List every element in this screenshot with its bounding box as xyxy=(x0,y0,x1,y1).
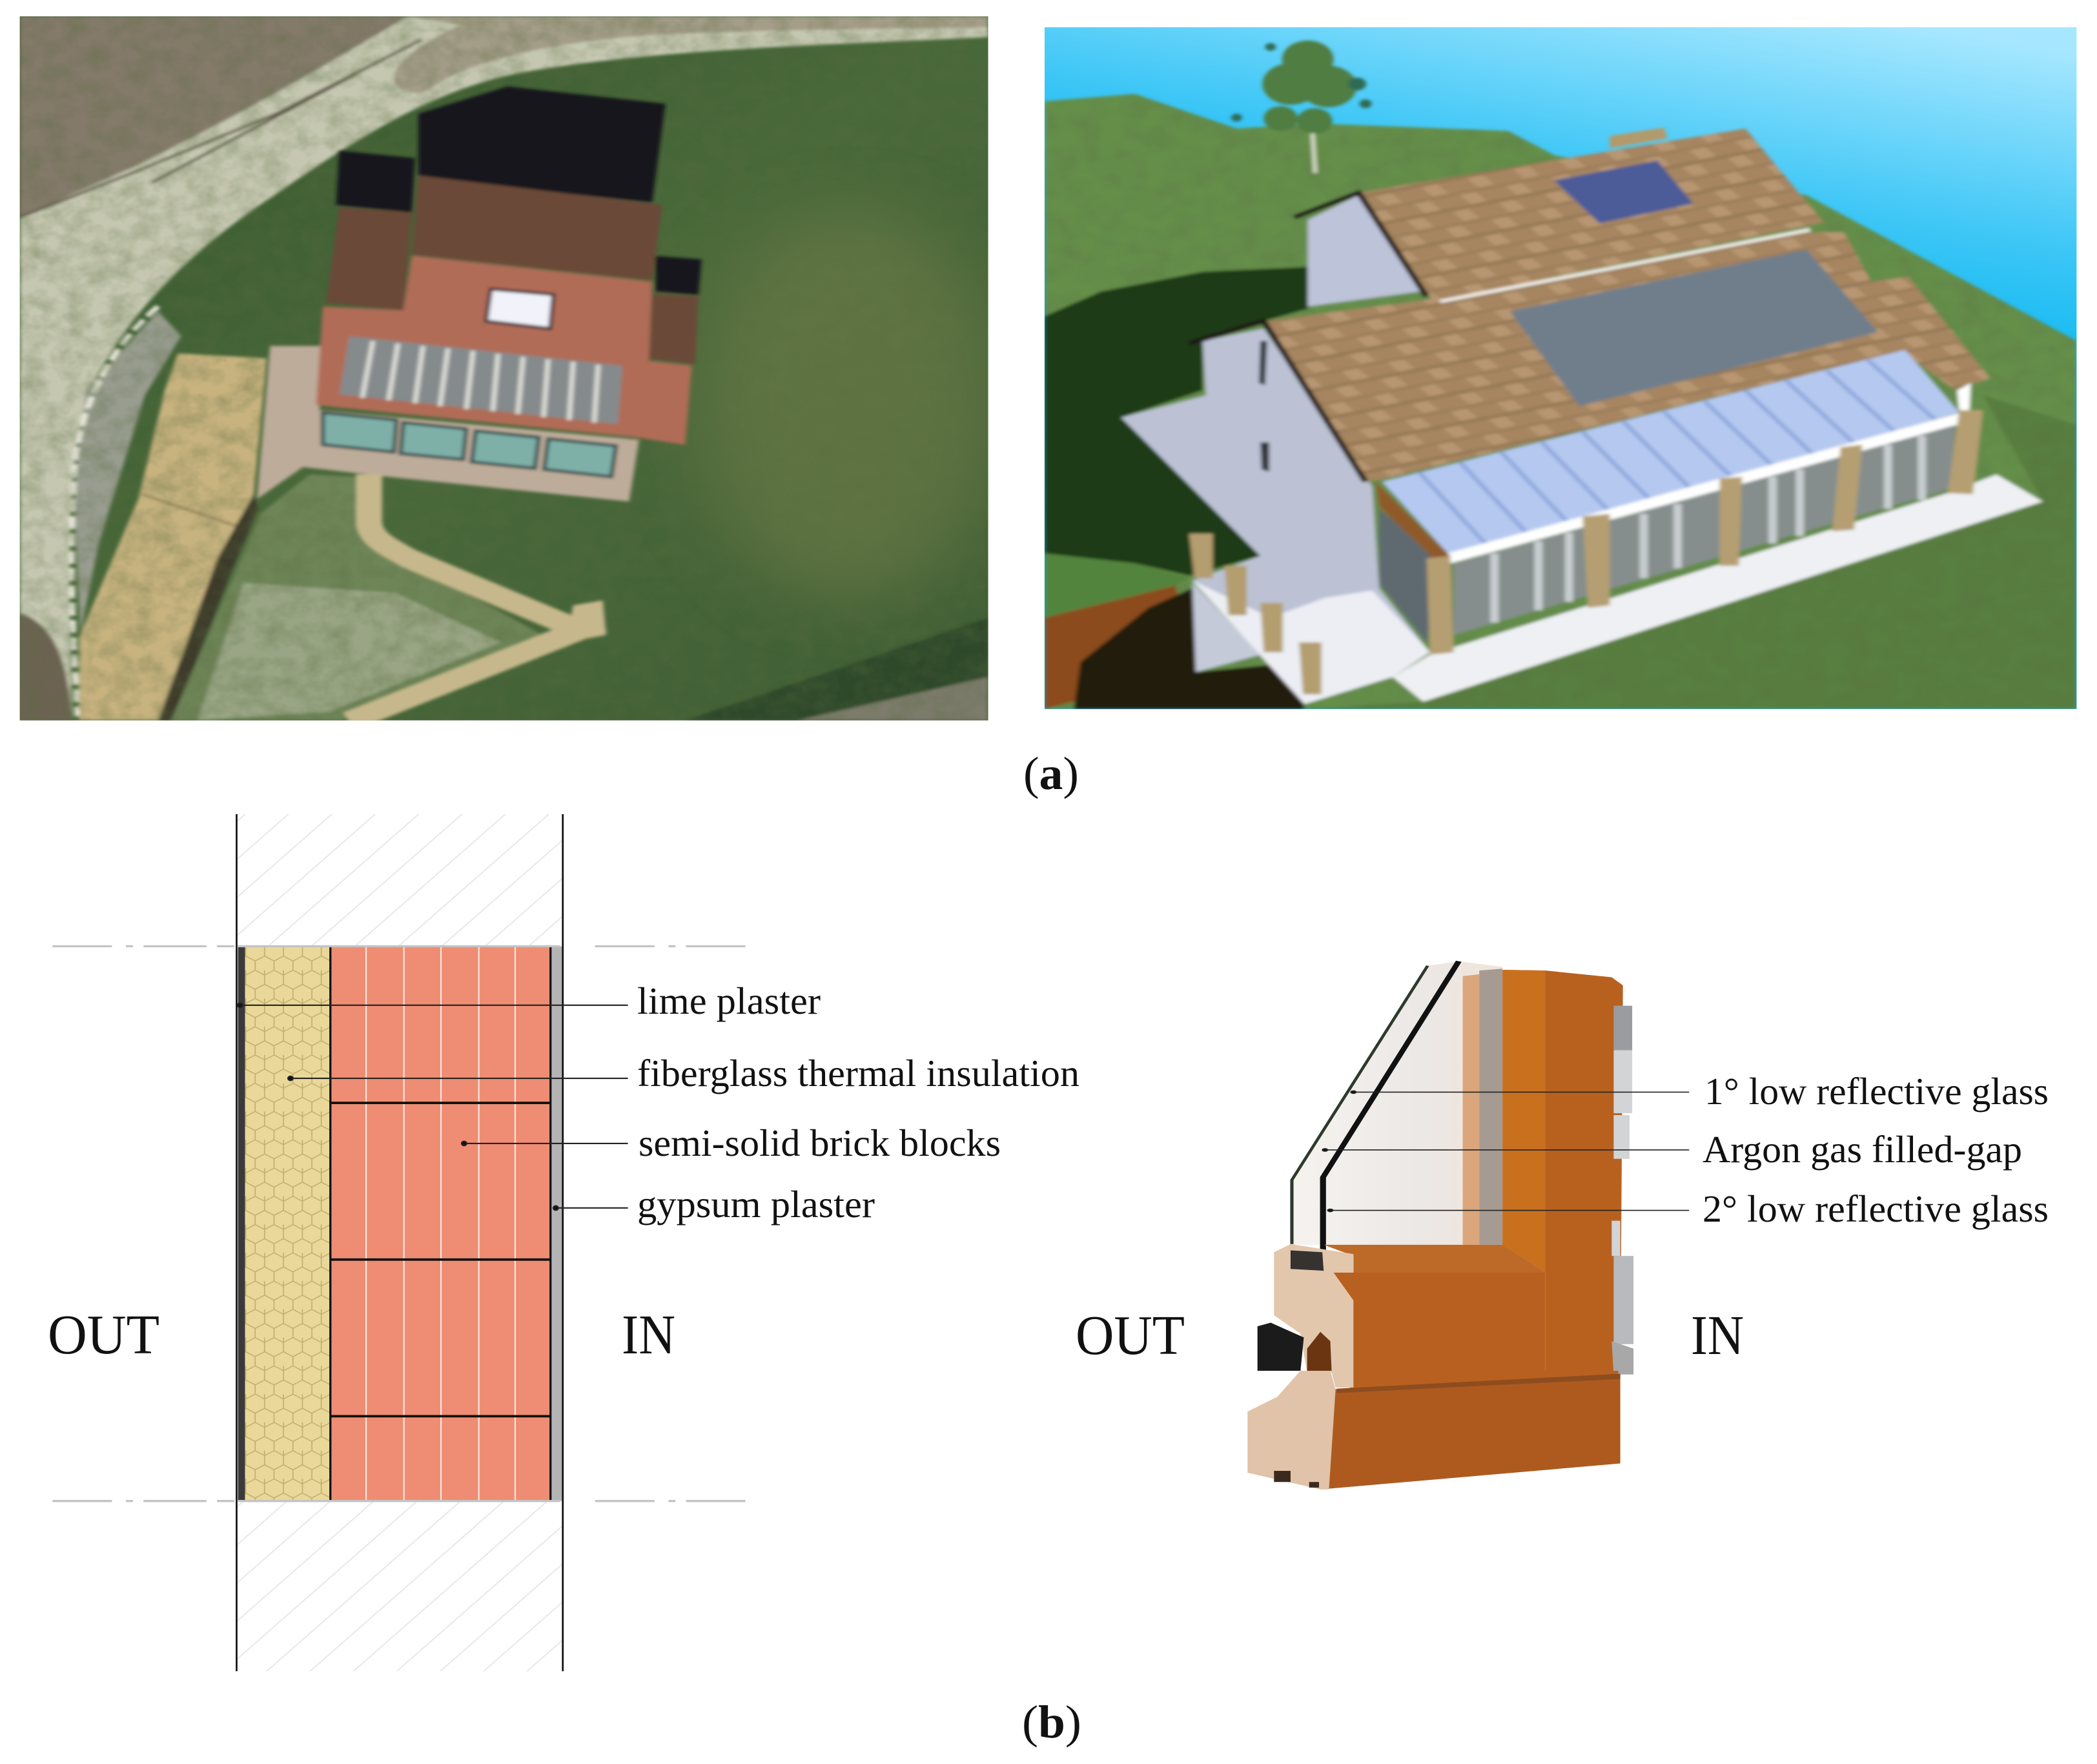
tan parking xyxy=(79,353,267,721)
sunspace glazing xyxy=(323,413,616,477)
building shadows xyxy=(336,87,702,295)
paved terrace xyxy=(257,346,639,502)
window labels: 2° low reflective glass xyxy=(1703,1187,2049,1230)
lower roof xyxy=(1263,232,1990,482)
diagram: wall stratigraphy xyxy=(52,814,746,1671)
skylight xyxy=(486,289,553,329)
brick block layer xyxy=(331,947,550,1501)
shadow on the hill xyxy=(1045,267,1308,576)
window leader lines xyxy=(1323,1091,1689,1212)
diagram: window frame section xyxy=(1247,961,1689,1490)
glazing xyxy=(1292,961,1502,1245)
window post xyxy=(1502,970,1623,1375)
photovoltaic field xyxy=(1510,249,1877,406)
walkway xyxy=(349,475,580,721)
wall labels: gypsum plaster xyxy=(637,1183,875,1226)
upper roof xyxy=(1358,128,1823,302)
label: OUT (wall): OUT xyxy=(48,1303,159,1366)
leader lines xyxy=(238,1003,628,1210)
pale gravel band xyxy=(20,16,988,721)
sash xyxy=(1324,1245,1546,1273)
front floor xyxy=(1393,475,2043,702)
wall labels xyxy=(637,979,1079,1226)
house walls xyxy=(1121,329,1430,657)
sunspace glass roof xyxy=(1382,350,1959,556)
wall labels: semi-solid brick blocks xyxy=(639,1122,1001,1164)
gypsum plaster layer xyxy=(551,947,562,1501)
wall labels: lime plaster xyxy=(637,979,821,1022)
second glass pane xyxy=(1323,961,1458,1262)
hills xyxy=(1045,94,2076,709)
tree xyxy=(1231,41,1371,134)
window labels: Argon gas filled-gap xyxy=(1703,1128,2022,1171)
stone pillars xyxy=(1427,410,1983,655)
panel: 3D model of the building xyxy=(1045,27,2076,709)
red roof xyxy=(316,256,691,445)
sunspace glazing bays xyxy=(1454,425,1956,635)
lower meadow xyxy=(171,475,547,721)
window labels xyxy=(1703,1070,2049,1230)
wall labels: fiberglass thermal insulation xyxy=(637,1052,1079,1094)
label: IN (wall): IN xyxy=(622,1303,675,1366)
label: OUT (window): OUT xyxy=(1076,1304,1185,1366)
solar thermal array xyxy=(340,336,622,424)
caption (b): (b) xyxy=(1022,1696,1081,1748)
brown roofs xyxy=(326,176,699,364)
window labels: 1° low reflective glass xyxy=(1704,1070,2049,1113)
caption (a): (a) xyxy=(1023,748,1079,799)
pale wood cut xyxy=(1274,1244,1353,1388)
roof beam xyxy=(1444,383,1970,564)
hinges xyxy=(1613,1006,1632,1051)
panel: aerial photo of the building xyxy=(20,16,1001,721)
fiberglass thermal insulation layer xyxy=(245,947,331,1501)
left terrace xyxy=(1192,580,1430,704)
chimney xyxy=(1610,127,1668,149)
first glass pane xyxy=(1292,966,1427,1244)
excavated earth xyxy=(1045,586,1196,709)
lime plaster layer xyxy=(238,947,245,1501)
label: IN (window): IN xyxy=(1691,1304,1744,1366)
solar panel xyxy=(1554,161,1693,223)
gray road xyxy=(74,311,181,633)
frame bottom xyxy=(1320,1374,1621,1490)
